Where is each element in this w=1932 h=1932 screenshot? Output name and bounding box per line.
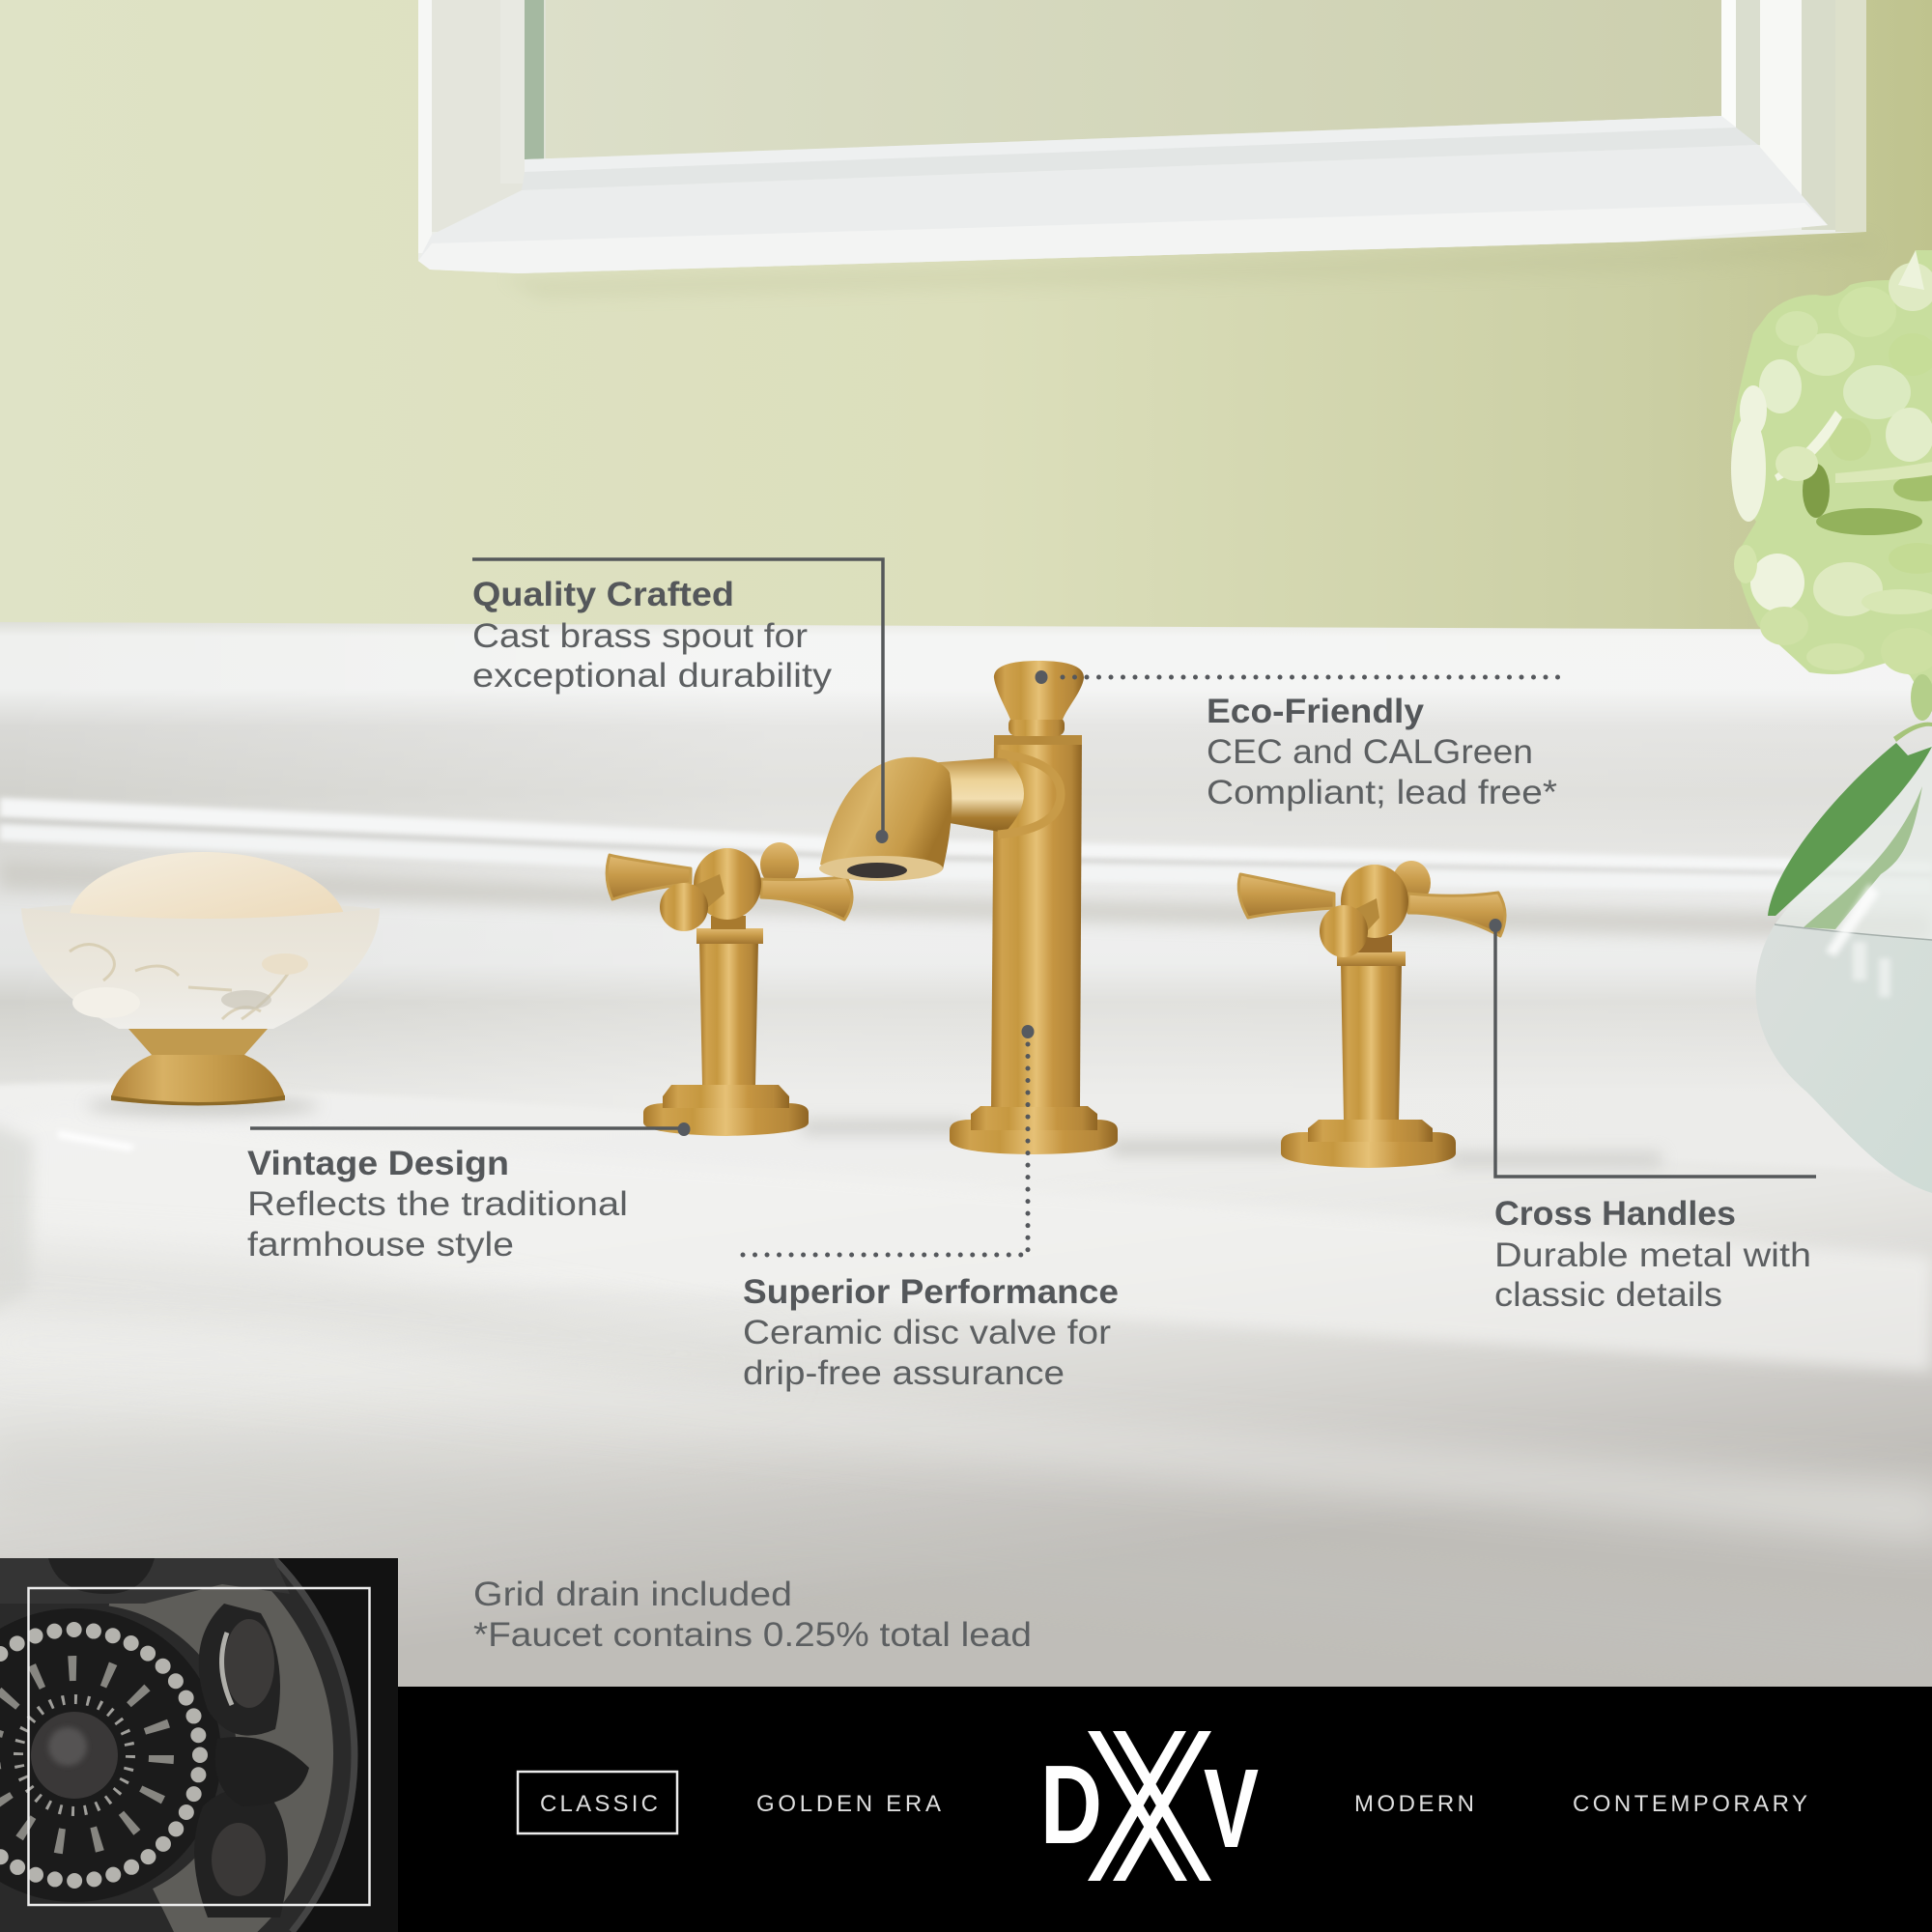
style selector: CLASSIC: CLASSIC xyxy=(540,1791,658,1817)
background: white wainscot moulding xyxy=(0,622,1932,1217)
style selector: CLASSIC xyxy=(518,1772,677,1833)
central faucet body xyxy=(819,661,1118,1154)
leaf xyxy=(1768,743,1932,916)
callout: Eco-Friendly xyxy=(1036,670,1570,811)
callout: Cross Handles: Durable metal with xyxy=(1494,1236,1811,1274)
swirl ornaments xyxy=(199,1604,280,1736)
mirror xyxy=(418,0,1874,299)
callout: Cross Handles: classic details xyxy=(1494,1276,1722,1314)
flower xyxy=(1731,250,1932,742)
callout: Quality Crafted: Quality Crafted xyxy=(472,576,734,613)
soap dish xyxy=(21,852,380,1116)
light relief between ornaments xyxy=(116,1558,285,1932)
callout: Superior Performance: Superior Performance xyxy=(743,1273,1119,1311)
callout: Superior Performance xyxy=(743,1025,1119,1392)
horizontal spout pipe xyxy=(927,757,1024,833)
callout: Quality Crafted: Cast brass spout for xyxy=(472,617,808,655)
right cross handle xyxy=(1238,861,1505,1168)
style label: MODERN: MODERN xyxy=(1354,1791,1474,1817)
callout: Vintage Design: Vintage Design xyxy=(247,1145,509,1182)
style label: GOLDEN ERA: GOLDEN ERA xyxy=(756,1791,941,1817)
aerator xyxy=(819,856,943,881)
frosted glass bowl xyxy=(21,908,380,1029)
logo: DXV xyxy=(1040,1731,1259,1881)
centre knob xyxy=(31,1712,118,1799)
footer black bar xyxy=(398,1687,1932,1932)
footnote text: *Faucet contains 0.25% total lead xyxy=(473,1616,1032,1654)
leaf ring xyxy=(0,1668,161,1842)
shadows under faucet parts xyxy=(802,1121,1662,1167)
background: sink counter xyxy=(0,1083,1932,1700)
callout: Vintage Design xyxy=(247,1122,690,1264)
logo: DXV: V xyxy=(1204,1746,1259,1871)
logo: DXV: D xyxy=(1040,1742,1102,1867)
spout curve xyxy=(820,757,952,875)
bead ring xyxy=(0,1630,200,1881)
callout: Vintage Design: Reflects the traditional xyxy=(247,1185,628,1223)
footnote text: Grid drain included xyxy=(473,1576,792,1613)
callout: Eco-Friendly: Compliant; lead free* xyxy=(1207,774,1557,811)
callout: Vintage Design: farmhouse style xyxy=(247,1226,514,1264)
inner white frame xyxy=(29,1588,369,1905)
background: green wall xyxy=(0,0,1932,638)
callout: Cross Handles xyxy=(1490,919,1816,1314)
vase with leaf xyxy=(1756,743,1932,1193)
style label: CONTEMPORARY: CONTEMPORARY xyxy=(1573,1791,1807,1817)
glass bowl xyxy=(1756,924,1932,1193)
left cross handle xyxy=(607,842,852,1136)
footnote text xyxy=(473,1576,1032,1654)
finial knob xyxy=(994,661,1084,720)
thumbnail: drain medallion xyxy=(0,1558,398,1932)
callout: Quality Crafted xyxy=(472,559,889,843)
callout: Eco-Friendly: Eco-Friendly xyxy=(1207,693,1425,730)
callout: Eco-Friendly: CEC and CALGreen xyxy=(1207,733,1533,771)
callout: Superior Performance: drip-free assurance xyxy=(743,1354,1065,1392)
spout ring xyxy=(998,753,1061,835)
callout: Quality Crafted: exceptional durability xyxy=(472,657,833,695)
soap xyxy=(69,852,345,924)
callout: Cross Handles: Cross Handles xyxy=(1494,1195,1736,1233)
callout: Superior Performance: Ceramic disc valve for xyxy=(743,1314,1111,1351)
back rim xyxy=(21,902,379,920)
gold pedestal xyxy=(128,1029,268,1055)
